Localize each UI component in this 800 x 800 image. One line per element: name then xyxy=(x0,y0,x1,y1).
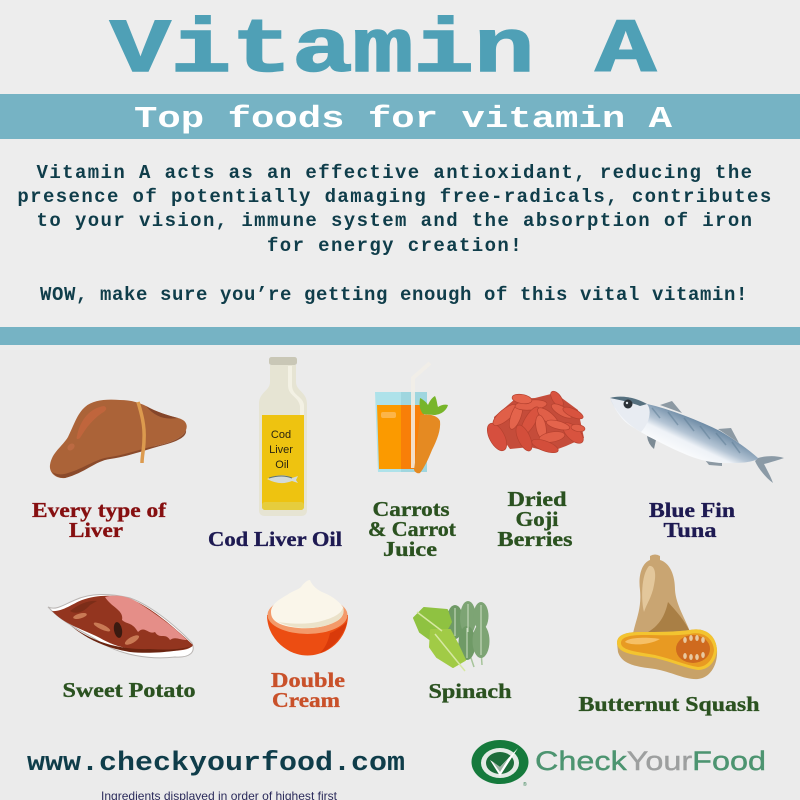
icon: cod liver oil bottle xyxy=(259,357,307,516)
website url: www.checkyourfood.com xyxy=(27,749,405,779)
icon: double cream bowl xyxy=(267,580,348,656)
icon: butternut squash xyxy=(617,554,717,679)
icon: cod liver oil bottle: Liver xyxy=(269,444,293,456)
banner: top foods xyxy=(0,94,800,139)
label: butternut squash: Butternut Squash xyxy=(578,692,760,716)
label: carrots and carrot juice xyxy=(368,497,456,561)
label: every type of liver: Every type of xyxy=(32,498,167,522)
label: double cream: Cream xyxy=(272,688,341,712)
logo: check your food: Check Your Food xyxy=(535,746,766,776)
label: blue fin tuna xyxy=(649,498,735,542)
label: double cream xyxy=(271,668,345,712)
icon: goji berries xyxy=(483,389,587,455)
intro text block: Vitamin A acts as an effective antioxidant, reducing the xyxy=(37,162,753,184)
label: cod liver oil: Cod Liver Oil xyxy=(208,527,342,551)
label: spinach: Spinach xyxy=(428,679,512,703)
label: dried goji berries: Berries xyxy=(498,527,572,551)
callout: wow message: WOW, make sure you’re getting enough of this vital vitamin! xyxy=(40,284,748,306)
icon: spinach xyxy=(414,601,490,671)
label: every type of liver xyxy=(32,498,167,542)
icon: blue fin tuna xyxy=(610,397,784,483)
label: every type of liver: Liver xyxy=(69,518,123,542)
label: blue fin tuna: Tuna xyxy=(664,518,717,542)
label: sweet potato: Sweet Potato xyxy=(62,678,196,702)
label: carrots and carrot juice: Juice xyxy=(383,537,437,561)
icon: sweet potato xyxy=(48,594,193,658)
icon: cod liver oil bottle: Cod xyxy=(271,429,291,441)
divider band xyxy=(0,327,800,345)
icon: liver xyxy=(50,400,187,478)
icon: carrot juice xyxy=(375,363,448,473)
intro text block: presence of potentially damaging free-radicals, contributes xyxy=(17,186,773,208)
label: carrots and carrot juice: & Carrot xyxy=(368,517,456,541)
label: carrots and carrot juice: Carrots xyxy=(372,497,450,521)
intro text block xyxy=(17,162,773,257)
logo: check your food: ® xyxy=(523,781,527,788)
label: dried goji berries: Dried xyxy=(508,487,567,511)
label: dried goji berries xyxy=(498,487,572,551)
icon: cod liver oil bottle: Oil xyxy=(275,459,289,471)
label: blue fin tuna: Blue Fin xyxy=(649,498,735,522)
intro text block: to your vision, immune system and the absorption of iron xyxy=(37,210,753,232)
logo: check your food xyxy=(472,740,766,788)
title: Vitamin A xyxy=(110,8,657,94)
intro text block: for energy creation! xyxy=(267,235,523,257)
label: double cream: Double xyxy=(271,668,345,692)
banner: top foods: Top foods for vitamin A xyxy=(134,102,672,137)
label: dried goji berries: Goji xyxy=(516,507,559,531)
